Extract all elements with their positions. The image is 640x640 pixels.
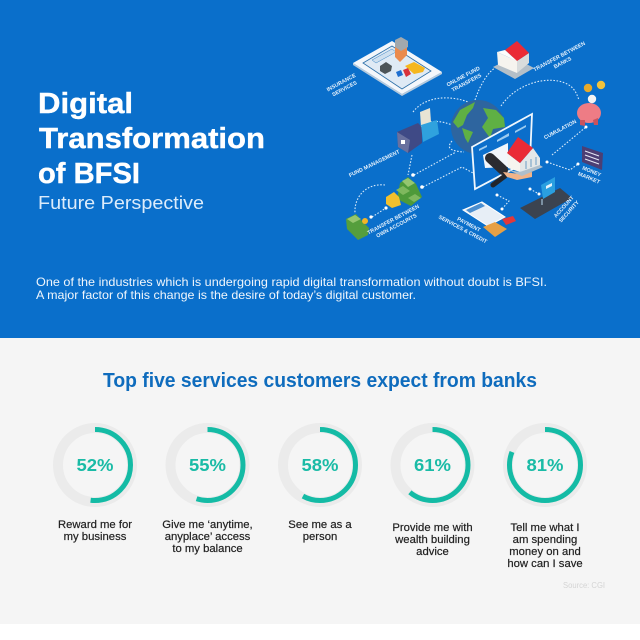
- icon: payment card: [463, 202, 516, 237]
- caption: spending: Tell me what I: [510, 522, 580, 534]
- caption: wealth: wealth building: [394, 534, 470, 546]
- donut: 52%: 52%: [76, 455, 114, 475]
- caption: spending: money on and: [509, 546, 581, 558]
- caption: wealth: Provide me with: [392, 522, 473, 534]
- label: payment services and credit: PAYMENT: [456, 216, 482, 234]
- icon: piggy bank and coins: [577, 81, 605, 126]
- label: transfer between own accounts: OWN ACCOUNTS: [376, 213, 418, 240]
- donut: 58%: [283, 428, 357, 502]
- label: insurance services: SERVICES: [331, 80, 359, 98]
- caption: anytime access: to my balance: [172, 543, 243, 555]
- icon: monitor with bank and hand: [472, 114, 543, 189]
- caption: anytime access: Give me ‘anytime,: [162, 519, 253, 531]
- label: online fund transfers: TRANSFERS: [451, 73, 483, 94]
- label: account security: ACCOUNT: [553, 195, 576, 219]
- donut: 61%: [396, 428, 470, 502]
- connector dots: [369, 126, 588, 219]
- label: insurance services: INSURANCE: [326, 73, 357, 93]
- label: cumulation: CUMULATION: [543, 119, 578, 141]
- donut: 81%: [508, 428, 582, 502]
- icon: globe: [451, 100, 505, 154]
- title: [38, 88, 265, 190]
- caption: wealth: advice: [416, 546, 449, 558]
- source: Source: CGI: [563, 581, 605, 590]
- panel: services: [0, 338, 640, 624]
- subtitle: Future Perspective: [38, 193, 204, 213]
- icon: money stacks: [346, 177, 422, 240]
- panel: blue header: [0, 0, 640, 338]
- illustration: digital banking network: [326, 37, 605, 246]
- icon: money market board: [582, 146, 603, 170]
- donut: 61%: 61%: [414, 455, 451, 475]
- title: Transformation: [39, 123, 265, 155]
- caption: reward: my business: [64, 531, 127, 543]
- intro text: [36, 275, 547, 302]
- caption: person: person: [303, 531, 337, 543]
- connector lines: [355, 68, 586, 217]
- intro text: One of the industries which is undergoing rapid digital transformation without doubt is BFSI.: [36, 275, 547, 289]
- caption: reward: Reward me for: [58, 519, 132, 531]
- label: transfer between own accounts: TRANSFER BETWEEN: [367, 204, 421, 236]
- caption: spending: am spending: [513, 534, 577, 546]
- intro text: A major factor of this change is the desire of today’s digital customer.: [36, 288, 416, 302]
- donut: 52%: [58, 428, 132, 502]
- label: transfer between banks: TRANSFER BETWEEN: [533, 41, 587, 73]
- label: online fund transfers: ONLINE FUND: [446, 66, 481, 88]
- label: money market: MONEY: [581, 166, 602, 179]
- label: money market: MARKET: [577, 171, 601, 186]
- heading: Top five services customers expect from banks: [103, 370, 537, 392]
- title: of BFSI: [38, 158, 140, 190]
- donut: 58%: 58%: [302, 455, 339, 475]
- donut: 55%: 55%: [189, 455, 226, 475]
- label: payment services and credit: SERVICES & CREDIT: [437, 215, 488, 246]
- caption: spending: how can I save: [507, 558, 583, 570]
- label: fund management: FUND MANAGEMENT: [348, 149, 402, 179]
- icon: account security keyboard: [520, 177, 572, 219]
- caption: anytime access: anyplace’ access: [165, 531, 251, 543]
- caption: person: See me as a: [288, 519, 352, 531]
- icon: bank building: [493, 41, 534, 79]
- donut: 55%: [170, 428, 244, 502]
- label: account security: SECURITY: [558, 200, 581, 224]
- title: Digital: [38, 88, 133, 120]
- icon: fund management safe: [397, 108, 439, 153]
- donut: 81%: 81%: [526, 455, 564, 475]
- label: transfer between banks: BANKS: [553, 56, 573, 70]
- icon: insurance tablet: [353, 37, 442, 96]
